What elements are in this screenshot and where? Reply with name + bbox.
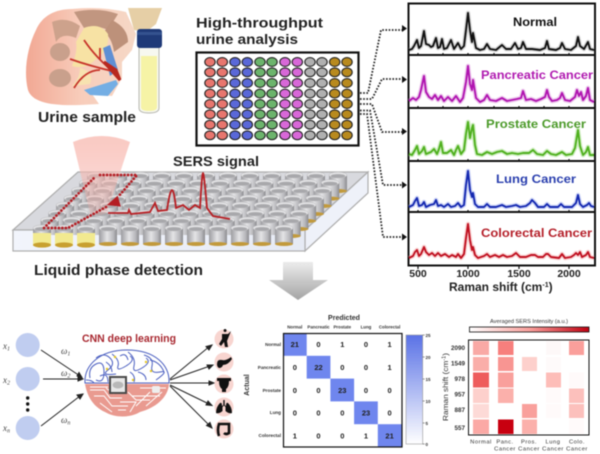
- matrix values: 0: [388, 386, 392, 395]
- heatmap column labels: Cancer: [494, 446, 516, 452]
- matrix values: 0: [293, 408, 297, 418]
- x axis title: Raman shift (cm: [449, 280, 542, 294]
- label: liquid phase detection: Liquid phase detection: [34, 262, 203, 279]
- heatmap column labels: Colo.: [569, 440, 585, 446]
- matrix values: [291, 340, 394, 440]
- row labels: Colorectal: [259, 433, 281, 438]
- colour scale: 15: [426, 377, 431, 382]
- matrix values: 0: [364, 340, 368, 349]
- heatmap y axis title: Raman shift (cm: [441, 366, 450, 421]
- colour scale: 25: [426, 333, 431, 338]
- icon: urine sample tube: [137, 29, 162, 113]
- matrix values: 0: [364, 363, 368, 372]
- laser cone: [73, 136, 130, 215]
- icon: colon: [214, 420, 234, 438]
- heatmap column labels: Panc.: [496, 440, 514, 446]
- neural network inputs: 2: [67, 374, 70, 380]
- arrow: down grey: [269, 262, 328, 300]
- matrix values: 0: [340, 408, 344, 418]
- matrix values: 0: [364, 386, 368, 395]
- icon: pancreas: [214, 352, 234, 372]
- matrix values: 0: [340, 363, 344, 372]
- x axis title: ): [549, 280, 553, 294]
- neural network inputs: [2, 333, 83, 440]
- matrix values: 21: [291, 340, 299, 349]
- matrix values: 1: [293, 432, 297, 440]
- spectrum: pancreatic cancer: [409, 66, 594, 102]
- matrix values: 23: [362, 408, 370, 418]
- x axis title: -1: [542, 282, 549, 289]
- spectrum labels: Pancreatic Cancer: [481, 68, 593, 82]
- spectrum: normal: [409, 13, 594, 50]
- neural network inputs: ω: [61, 346, 67, 356]
- matrix values: 1: [340, 340, 344, 349]
- colour scale: 10: [426, 399, 431, 404]
- heatmap row labels: 978: [454, 376, 465, 383]
- row labels: Prostate: [263, 388, 281, 393]
- neural network inputs: x: [3, 341, 7, 351]
- column labels: Prostate: [334, 324, 352, 330]
- neural network inputs: n: [67, 420, 70, 426]
- heatmap row labels: 957: [454, 392, 465, 398]
- label: urine sample: Urine sample: [38, 109, 136, 126]
- well plate: coloured samples: [196, 52, 358, 146]
- x axis tick labels: [409, 268, 581, 280]
- heatmap row labels: [451, 345, 465, 432]
- heatmap row labels: 557: [454, 425, 465, 432]
- neural network inputs: x: [3, 423, 7, 433]
- heatmap row labels: 1549: [451, 360, 465, 368]
- heading: CNN deep learning: CNN deep learning: [82, 333, 176, 345]
- heading: high-throughput urine analysis: [196, 14, 323, 47]
- matrix cells: [283, 333, 402, 447]
- colour scale: 20: [426, 355, 431, 360]
- row labels: Lung: [270, 410, 281, 415]
- row labels: Pancreatic: [258, 365, 281, 370]
- column labels: [287, 324, 400, 330]
- 3D well plate: liquid phase detection: [13, 172, 368, 251]
- column labels: Normal: [287, 324, 302, 330]
- heading: high-throughput urine analysis: High-throughput: [196, 14, 323, 30]
- matrix values: 0: [293, 363, 297, 372]
- SERS spectrum line: [108, 173, 230, 219]
- heatmap column labels: Lung: [546, 440, 560, 446]
- heatmap column labels: [470, 440, 588, 452]
- spectrum labels: Normal: [513, 15, 557, 29]
- filled sample wells: [33, 233, 95, 248]
- icon: brain: [85, 350, 169, 416]
- matrix values: 1: [388, 363, 392, 372]
- neural network inputs: n: [7, 428, 10, 434]
- column labels: Colorectal: [379, 324, 400, 330]
- matrix values: 1: [388, 340, 392, 349]
- colour scale: 5: [426, 421, 428, 426]
- neural network inputs: x: [3, 375, 7, 385]
- label: SERS signal: SERS signal: [173, 153, 259, 169]
- x axis tick labels: 2000: [557, 268, 581, 280]
- icon: prostate: [214, 374, 234, 394]
- column labels: Pancreatic: [307, 324, 330, 330]
- neural network inputs: 1: [67, 352, 70, 358]
- neural network inputs: ω: [61, 368, 67, 378]
- heatmap column labels: Pros.: [521, 440, 537, 446]
- matrix values: 0: [316, 386, 321, 395]
- spectrum labels: [481, 15, 593, 240]
- matrix values: 0: [293, 386, 297, 395]
- heatmap column labels: Normal: [470, 440, 492, 446]
- spectrum: lung cancer: [409, 171, 594, 207]
- heatmap row labels: 887: [454, 407, 465, 414]
- red dotted scan path: [44, 175, 137, 228]
- illustration: kidney: [26, 8, 162, 105]
- row labels: [258, 342, 281, 438]
- heatmap title: Averaged SERS Intensity (a.u.): [490, 319, 568, 325]
- x axis tick labels: 1500: [507, 268, 531, 280]
- matrix values: 23: [338, 386, 346, 395]
- matrix values: 0: [340, 432, 344, 440]
- heatmap cells: [473, 341, 584, 434]
- confusion matrix: [244, 315, 431, 447]
- axis title: actual: Actual: [244, 374, 251, 396]
- neural network inputs: 1: [7, 346, 10, 352]
- spectrum labels: Colorectal Cancer: [481, 226, 592, 240]
- colour scale: 0: [426, 442, 428, 447]
- matrix values: 0: [316, 432, 321, 440]
- heatmap y axis title: -1: [442, 356, 448, 361]
- panel: Raman spectra: [408, 4, 595, 294]
- matrix values: 21: [385, 432, 394, 440]
- x axis tick labels: 1000: [456, 268, 480, 280]
- matrix values: 1: [364, 432, 368, 440]
- x axis tick labels: 500: [409, 268, 427, 280]
- icon: lungs: [214, 398, 234, 416]
- heatmap column labels: Cancer: [542, 446, 564, 452]
- heatmap y axis title: ): [441, 352, 450, 356]
- output arrows: [170, 345, 214, 428]
- neural network inputs: ω: [61, 415, 67, 425]
- spectrum: prostate cancer: [409, 122, 594, 155]
- intensity scale: [470, 327, 589, 332]
- neural network inputs: 2: [7, 380, 10, 386]
- colour scale: [406, 333, 431, 447]
- spectrum: colorectal cancer: [409, 224, 594, 258]
- spectrum labels: Lung Cancer: [496, 172, 576, 186]
- spectrum labels: Prostate Cancer: [486, 117, 586, 131]
- heatmap row labels: 2090: [451, 345, 465, 352]
- matrix values: 0: [316, 408, 321, 418]
- row labels: Normal: [265, 342, 281, 347]
- matrix values: 0: [388, 408, 392, 418]
- dotted connectors: plate to spectra: [360, 25, 407, 240]
- axis title: predicted: Predicted: [328, 315, 360, 322]
- heading: high-throughput urine analysis: urine analysis: [196, 31, 298, 47]
- heatmap: [451, 319, 589, 452]
- matrix values: 0: [316, 340, 321, 349]
- icon: person: [214, 329, 234, 348]
- heatmap column labels: Cancer: [566, 446, 588, 452]
- heatmap column labels: Cancer: [518, 446, 540, 452]
- column labels: Lung: [361, 324, 372, 330]
- matrix values: 22: [314, 363, 323, 372]
